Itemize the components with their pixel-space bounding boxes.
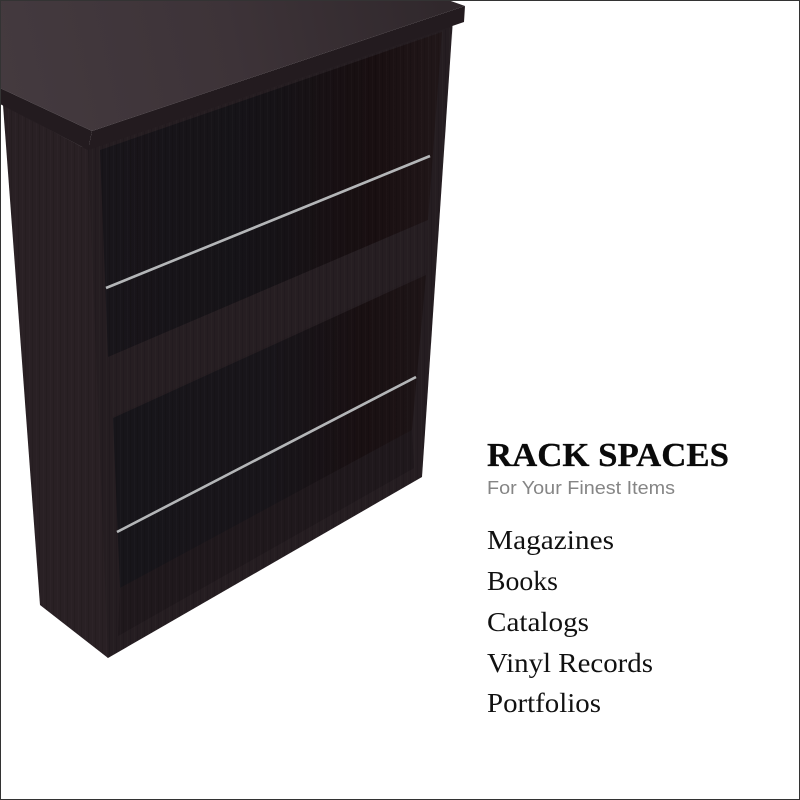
lower chrome rail — [117, 377, 416, 532]
item: magazines: Magazines — [487, 525, 614, 555]
item: portfolios: Portfolios — [487, 688, 601, 718]
item: vinyl records: Vinyl Records — [487, 648, 653, 678]
front frame — [80, 18, 453, 658]
upper chrome rail — [106, 156, 430, 288]
lower front board — [118, 430, 414, 636]
front slat — [108, 220, 428, 417]
desktop top surface — [0, 0, 465, 131]
lower shelf opening — [113, 275, 426, 588]
item: books: Books — [487, 566, 558, 596]
heading: RACK SPACES — [487, 437, 729, 474]
item: catalogs: Catalogs — [487, 607, 589, 637]
bookcase desk illustration — [0, 0, 465, 658]
list of items — [487, 525, 653, 718]
side panel — [3, 105, 108, 658]
wood grain texture — [3, 27, 453, 658]
desktop left edge — [0, 88, 92, 150]
subheading: For Your Finest Items — [487, 478, 675, 498]
desktop front edge — [88, 6, 465, 150]
upper shelf opening — [100, 32, 442, 357]
